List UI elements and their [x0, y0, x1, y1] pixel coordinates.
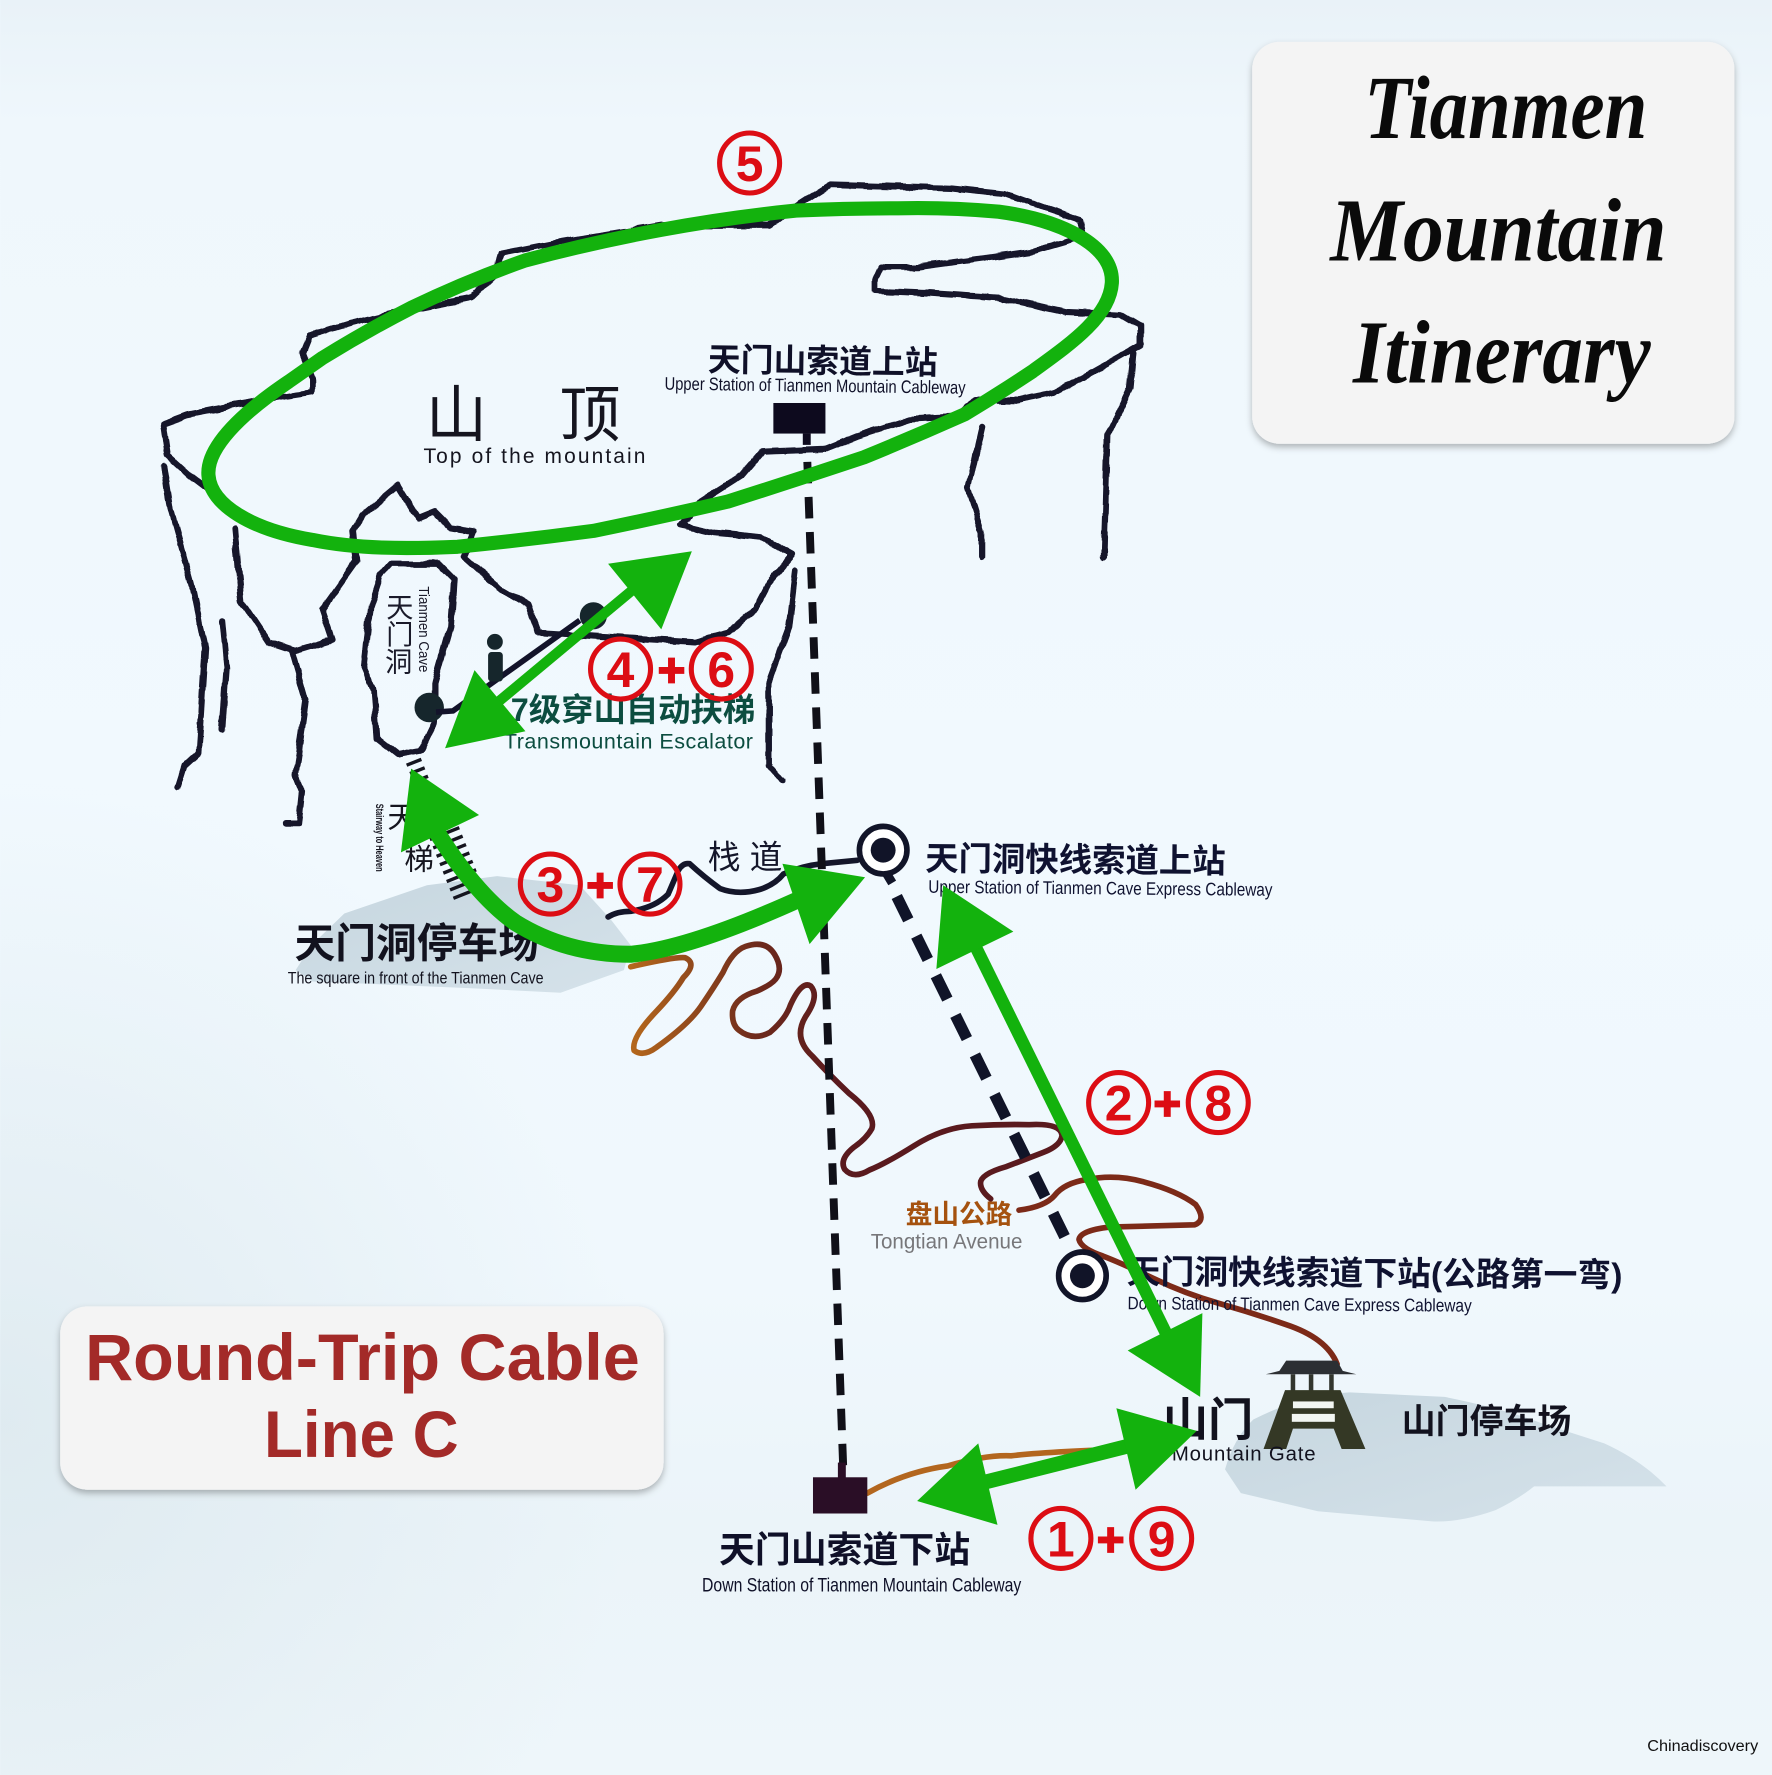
label: top of the mountain: 顶 — [559, 381, 621, 449]
label: heavenly stairway — [373, 802, 434, 876]
label: top of the mountain: Top of the mountain — [424, 445, 645, 468]
label: Mountain Gate: Mountain Gate — [1172, 1443, 1316, 1465]
label: Mountain Gate — [1163, 1394, 1316, 1465]
cliff walkway — [608, 860, 857, 917]
cableway dashed line: Tianmen Cave Express — [897, 897, 1072, 1252]
label: lower station of cave express: Down Station of Tianmen Cave Express Cableway — [1128, 1293, 1473, 1316]
label: lower station of cave express — [1126, 1254, 1623, 1317]
green loop around summit — [208, 208, 1112, 548]
arrow: steps 2 and 8 — [936, 885, 1202, 1397]
label: Tongtian Avenue — [871, 1200, 1022, 1254]
upper station marker: cave express — [859, 826, 907, 883]
label: heavenly stairway: 梯 — [404, 843, 434, 876]
label: Tianmen Cave — [385, 586, 431, 677]
step marker 4 + 6: 6 — [707, 642, 735, 698]
road: Tongtian Avenue winding — [631, 944, 1337, 1493]
icon: mountain gate — [1264, 1361, 1365, 1449]
label: Tianmen Cave parking: The square in front of the Tianmen Cave — [288, 969, 544, 988]
label: transmountain escalator — [504, 692, 755, 753]
label: Tianmen Cave parking — [288, 921, 544, 988]
step marker 2 + 8: + — [1153, 1078, 1181, 1131]
label: upper station of cave express: Upper Station of Tianmen Cave Express Cableway — [928, 877, 1273, 900]
label: top of the mountain — [424, 381, 645, 468]
label: heavenly stairway: Stairway to Heaven — [373, 804, 385, 872]
label: Tongtian Avenue: Tongtian Avenue — [871, 1230, 1022, 1254]
label: upper station of cave express — [925, 841, 1274, 900]
step marker 4 + 6: + — [658, 644, 685, 697]
step marker 3 + 7 — [520, 854, 680, 914]
Tianmen Cave outline — [364, 564, 454, 755]
step marker 1 + 9: 1 — [1047, 1512, 1075, 1568]
step marker 1 + 9: + — [1097, 1513, 1125, 1566]
label: lower station of Tianmen Mountain cableway: 天门山索道下站 — [719, 1530, 970, 1570]
label: Tianmen Cave: 洞 — [385, 646, 412, 677]
step marker 3 + 7: 3 — [537, 857, 564, 913]
label: Tianmen Cave parking: 天门洞停车场 — [295, 921, 539, 967]
parking lot blob: Mountain Gate — [1225, 1392, 1667, 1522]
label: upper station of Tianmen Mountain cableway: 天门山索道上站 — [708, 341, 938, 381]
arrow: steps 4 and 6 — [445, 551, 692, 748]
step marker 5 — [720, 133, 780, 193]
label: Mountain Gate: 山门 — [1163, 1394, 1253, 1445]
label: Tianmen Cave: 天 — [386, 592, 413, 623]
step marker 3 + 7: + — [586, 859, 614, 912]
label: Mountain Gate parking: 山门停车场 — [1402, 1403, 1571, 1441]
step marker 5: 5 — [736, 136, 763, 192]
parking lot blob: Tianmen Cave — [296, 876, 631, 993]
route text: Round-Trip Cable — [85, 1321, 640, 1394]
label: walkway: 栈 道 — [708, 838, 782, 875]
step marker 2 + 8: 8 — [1204, 1076, 1232, 1132]
escalator line and person icons — [415, 602, 607, 722]
label: upper station of cave express: 天门洞快线索道上站 — [925, 841, 1226, 881]
step marker 2 + 8: 2 — [1105, 1076, 1132, 1132]
watermark: Chinadiscovery — [1647, 1738, 1758, 1755]
title text: Mountain — [1329, 179, 1667, 280]
label: Tianmen Cave: Tianmen Cave — [415, 586, 431, 672]
route text — [85, 1321, 640, 1471]
label: upper station of Tianmen Mountain cableway: Upper Station of Tianmen Mountain Cableway — [664, 374, 967, 398]
cableway dashed line: Tianmen Mountain — [807, 462, 844, 1477]
arrow: steps 1 and 9 — [917, 1408, 1197, 1525]
arrow: steps 3 and 7 — [401, 769, 865, 954]
step marker 1 + 9 — [1031, 1508, 1192, 1568]
label: Tongtian Avenue: 盘山公路 — [906, 1200, 1013, 1230]
step marker 4 + 6: 4 — [607, 642, 635, 698]
label: lower station of cave express: 天门洞快线索道下站(公路第一弯) — [1127, 1254, 1623, 1295]
label: top of the mountain: 山 — [426, 381, 487, 449]
step marker 2 + 8 — [1089, 1073, 1248, 1133]
lower station marker: Tianmen Mountain — [813, 1463, 867, 1514]
title text: Itinerary — [1352, 302, 1651, 403]
label: lower station of Tianmen Mountain cableway — [702, 1530, 1022, 1597]
route text: Line C — [264, 1398, 459, 1471]
title text: Tianmen — [1364, 57, 1647, 158]
label: transmountain escalator: Transmountain Escalator — [504, 729, 753, 753]
upper station marker: Tianmen Mountain — [773, 403, 825, 445]
label: heavenly stairway: 天 — [387, 802, 417, 835]
mountain outline drawing — [163, 185, 1140, 824]
title card — [1252, 42, 1734, 444]
label: lower station of Tianmen Mountain cableway: Down Station of Tianmen Mountain Cableway — [702, 1576, 1022, 1597]
label: transmountain escalator: 7级穿山自动扶梯 — [511, 692, 755, 728]
route card — [60, 1306, 664, 1490]
label: upper station of Tianmen Mountain cableway — [664, 340, 967, 398]
step marker 1 + 9: 9 — [1148, 1512, 1175, 1568]
title text — [1329, 57, 1667, 403]
step marker 4 + 6 — [591, 639, 751, 699]
label: Tianmen Cave: 门 — [386, 619, 413, 650]
heavenly stairway hatch — [413, 761, 469, 894]
step marker 3 + 7: 7 — [636, 857, 664, 913]
lower station marker: cave express — [1059, 1252, 1106, 1300]
